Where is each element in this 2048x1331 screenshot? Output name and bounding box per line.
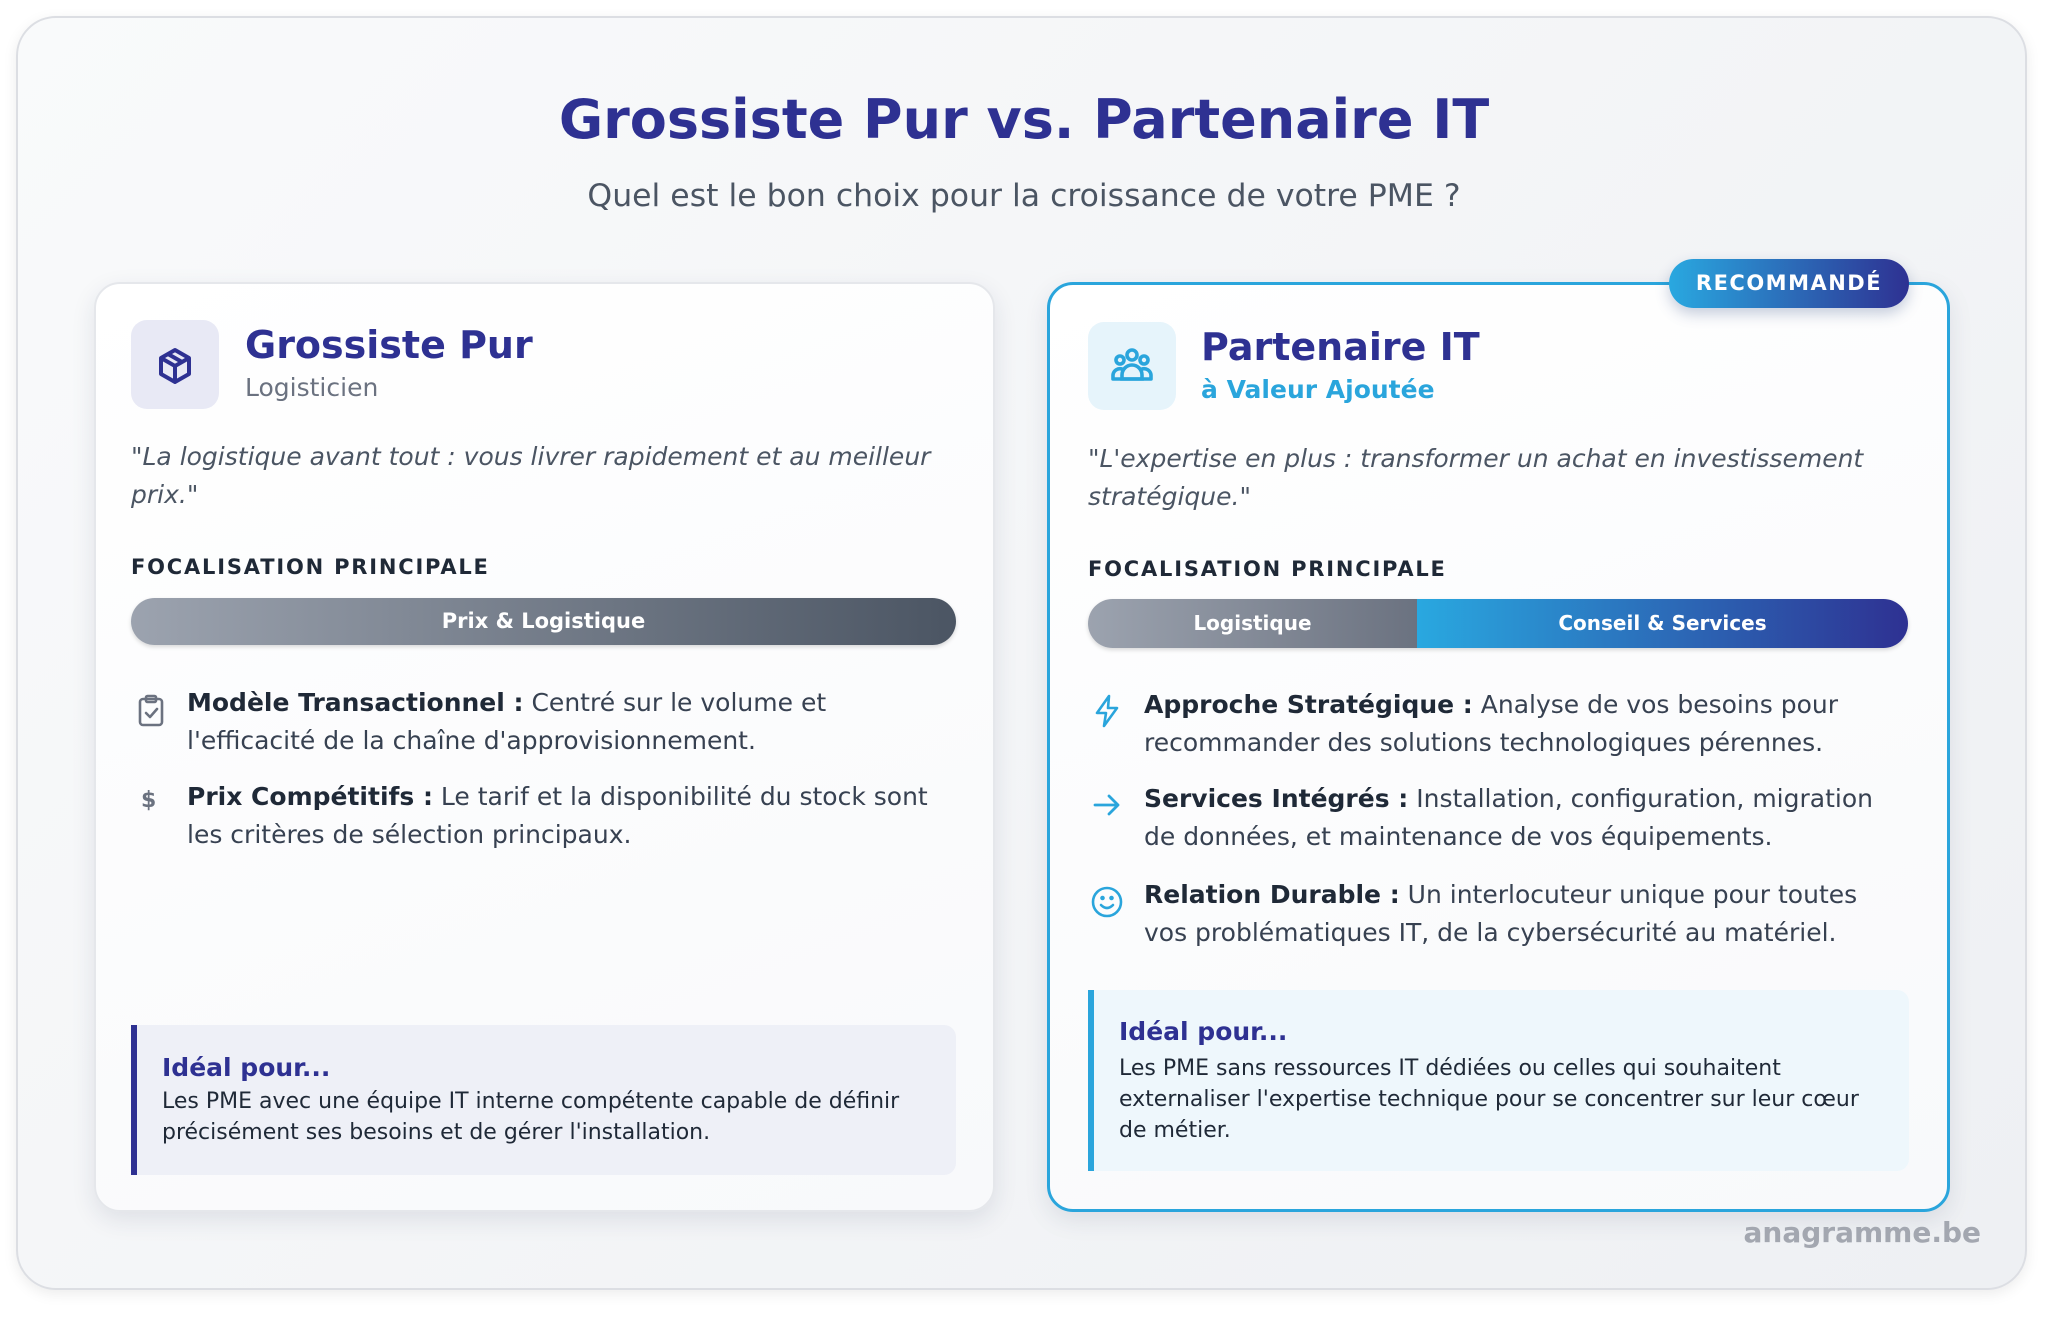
item: relation: Relation Durable : Un interlocuteur unique pour toutes: [1144, 880, 1857, 909]
ideal box: Idéal pour...: [1119, 1017, 1287, 1046]
badge: recommandé: RECOMMANDÉ: [1696, 271, 1882, 295]
item: relation: [1092, 880, 1857, 947]
icon: dollar: $: [141, 788, 156, 813]
heading: Grossiste Pur: [245, 323, 533, 367]
split focus bar: Conseil & Services: [1558, 611, 1767, 635]
quote: prix.": [131, 480, 198, 509]
ideal box: Les PME sans ressources IT dédiées ou celles qui souhaitent: [1119, 1056, 1781, 1081]
focal label: FOCALISATION PRINCIPALE: [131, 555, 490, 579]
split focus bar: [1088, 599, 1908, 648]
split focus bar: Logistique: [1193, 611, 1312, 635]
item: approche: Approche Stratégique : Analyse de vos besoins pour: [1144, 690, 1838, 719]
icon: clipboard: [138, 694, 164, 726]
quote: [1088, 444, 1864, 511]
item: prix: les critères de sélection principaux.: [187, 820, 631, 849]
subtitle: Quel est le bon choix pour la croissance de votre PME ?: [587, 178, 1461, 214]
item: approche: [1096, 690, 1838, 757]
item: services: [1094, 784, 1873, 851]
quote: "La logistique avant tout : vous livrer rapidement et au meilleur: [131, 442, 930, 471]
item: prix: Prix Compétitifs : Le tarif et la disponibilité du stock sont: [187, 782, 928, 811]
ideal box: de métier.: [1119, 1118, 1231, 1143]
title: Grossiste Pur vs. Partenaire IT: [559, 88, 1489, 151]
ideal box: précisément ses besoins et de gérer l'installation.: [162, 1120, 710, 1145]
item: transactionnel: Modèle Transactionnel : Centré sur le volume et: [187, 688, 826, 717]
subheading: à Valeur Ajoutée: [1201, 375, 1435, 404]
ideal box: [131, 1025, 956, 1175]
item: prix: [141, 782, 928, 849]
icon: arrow: [1094, 794, 1120, 816]
icon: bolt: [1096, 694, 1118, 728]
quote: stratégique.": [1088, 482, 1251, 511]
item: services: de données, et maintenance de vos équipements.: [1144, 822, 1772, 851]
subheading: Logisticien: [245, 373, 378, 402]
item: transactionnel: l'efficacité de la chaîne d'approvisionnement.: [187, 726, 756, 755]
panel: grossiste pur: [94, 282, 995, 1212]
icon: people: [1088, 322, 1176, 410]
heading: Partenaire IT: [1201, 325, 1480, 369]
quote: "L'expertise en plus : transformer un achat en investissement: [1088, 444, 1863, 473]
footer brand: anagramme.be: [1744, 1216, 1981, 1249]
icon: box: [131, 320, 219, 409]
panel: partenaire IT: [1047, 282, 1950, 1212]
icon: smile: [1092, 886, 1122, 918]
item: approche: recommander des solutions technologiques pérennes.: [1144, 728, 1823, 757]
badge: recommandé: [1669, 259, 1909, 308]
ideal box: [1088, 990, 1909, 1171]
item: transactionnel: [138, 688, 826, 755]
item: relation: vos problématiques IT, de la cybersécurité au matériel.: [1144, 918, 1836, 947]
ideal box: Idéal pour...: [162, 1053, 330, 1082]
focus bar: Prix & Logistique: [442, 609, 645, 633]
ideal box: Les PME avec une équipe IT interne compétente capable de définir: [162, 1089, 899, 1114]
focal label: FOCALISATION PRINCIPALE: [1088, 557, 1447, 581]
focus bar: [131, 598, 956, 645]
ideal box: externaliser l'expertise technique pour se concentrer sur leur cœur: [1119, 1087, 1859, 1112]
item: services: Services Intégrés : Installation, configuration, migration: [1144, 784, 1873, 813]
quote: [131, 442, 932, 509]
